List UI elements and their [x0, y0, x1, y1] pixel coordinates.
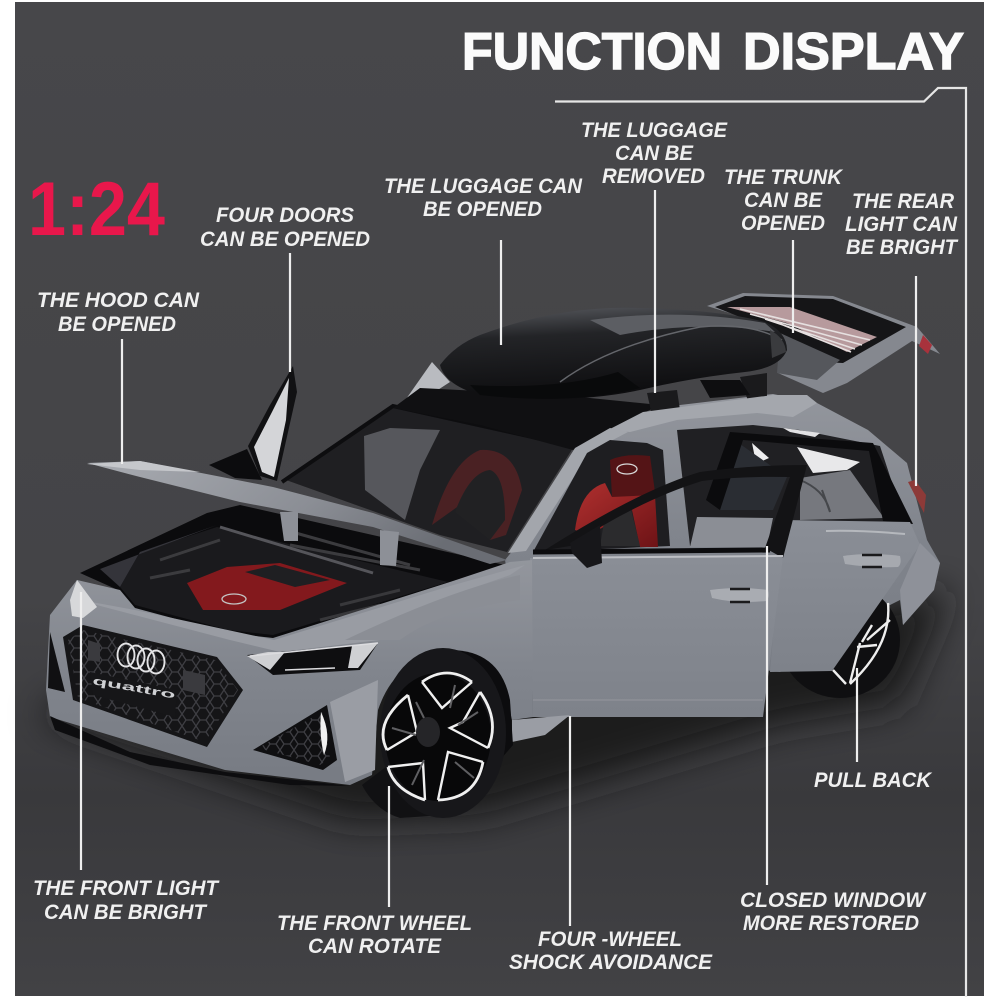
- rear light: [908, 480, 926, 513]
- callout: shock avoidance: SHOCK AVOIDANCE: [509, 950, 713, 974]
- callout: shock avoidance: FOUR -WHEEL: [538, 927, 682, 951]
- front seat: [575, 455, 658, 547]
- side window openings: [533, 425, 905, 552]
- callout: trunk: THE TRUNK: [724, 165, 843, 189]
- callout: front wheel: THE FRONT WHEEL: [277, 911, 472, 935]
- callout: trunk: [724, 165, 843, 333]
- front door open: [530, 465, 807, 717]
- callout: luggage removed: [581, 118, 728, 393]
- roof rail highlight: [608, 395, 817, 432]
- callout: rear light: BE BRIGHT: [846, 235, 959, 259]
- rear body shell: [505, 394, 940, 672]
- callout: trunk: CAN BE: [744, 188, 823, 212]
- rear door window and seat: [690, 444, 830, 547]
- callout: front light: [33, 592, 220, 924]
- callout: luggage removed: CAN BE: [615, 141, 694, 165]
- callout: hood: [37, 288, 199, 464]
- quattro badge: quattro: [91, 675, 177, 702]
- roof box: [440, 308, 787, 399]
- front wheel: [362, 648, 513, 818]
- callout: front wheel: CAN ROTATE: [308, 934, 442, 958]
- black roof: [393, 388, 660, 450]
- open trunk lid: [707, 293, 940, 393]
- callout: closed window: CLOSED WINDOW: [740, 888, 927, 912]
- title: [462, 23, 964, 81]
- open hood: [87, 461, 507, 566]
- callout: luggage removed: REMOVED: [602, 164, 705, 188]
- callout: shock avoidance: [509, 716, 713, 974]
- front grille: [63, 625, 243, 747]
- callout: four doors: FOUR DOORS: [216, 203, 355, 227]
- callout: luggage removed: THE LUGGAGE: [581, 118, 728, 142]
- car model: [46, 293, 940, 818]
- callout: pull back: [814, 668, 932, 792]
- callout: luggage opened: BE OPENED: [423, 197, 542, 221]
- title: DISPLAY: [743, 23, 964, 81]
- rear wheel: [780, 582, 900, 698]
- lower intake: [253, 705, 337, 770]
- callout: rear light: [845, 189, 959, 486]
- callout: four doors: [200, 203, 370, 372]
- callout: luggage opened: THE LUGGAGE CAN: [384, 174, 582, 198]
- side mirror: [570, 525, 602, 568]
- roof rack feet: [647, 373, 767, 420]
- a pillar highlight: [508, 428, 628, 553]
- scale label: 1:24: [28, 167, 165, 252]
- callout: front wheel: [277, 786, 472, 958]
- far rear pillar: [404, 362, 450, 402]
- windshield: [282, 406, 573, 552]
- floor shadow under car: [40, 590, 950, 820]
- left headlight: [70, 580, 97, 618]
- callout: front light: CAN BE BRIGHT: [44, 900, 208, 924]
- engine bay: [80, 505, 505, 640]
- callout: rear light: THE REAR: [852, 189, 954, 213]
- callout: four doors: CAN BE OPENED: [200, 227, 370, 251]
- rear bumper: [900, 543, 940, 625]
- left intake: [48, 632, 65, 692]
- callout: front light: THE FRONT LIGHT: [33, 876, 220, 900]
- callout: hood: THE HOOD CAN: [37, 288, 199, 312]
- front body: [46, 560, 570, 785]
- header rule: [555, 88, 966, 997]
- callout: rear light: LIGHT CAN: [845, 212, 957, 236]
- callout: hood: BE OPENED: [58, 312, 176, 336]
- rear door open: [706, 432, 920, 672]
- callout: trunk: OPENED: [741, 211, 825, 235]
- callout: closed window: [740, 546, 927, 935]
- callout: luggage opened: [384, 174, 582, 345]
- right headlight: [247, 643, 378, 675]
- title: FUNCTION: [462, 23, 722, 81]
- callout: pull back: PULL BACK: [814, 768, 932, 792]
- logo rings: [118, 644, 164, 674]
- front splitter: [50, 716, 350, 786]
- callout: closed window: MORE RESTORED: [743, 911, 919, 935]
- far side door open: [209, 366, 297, 481]
